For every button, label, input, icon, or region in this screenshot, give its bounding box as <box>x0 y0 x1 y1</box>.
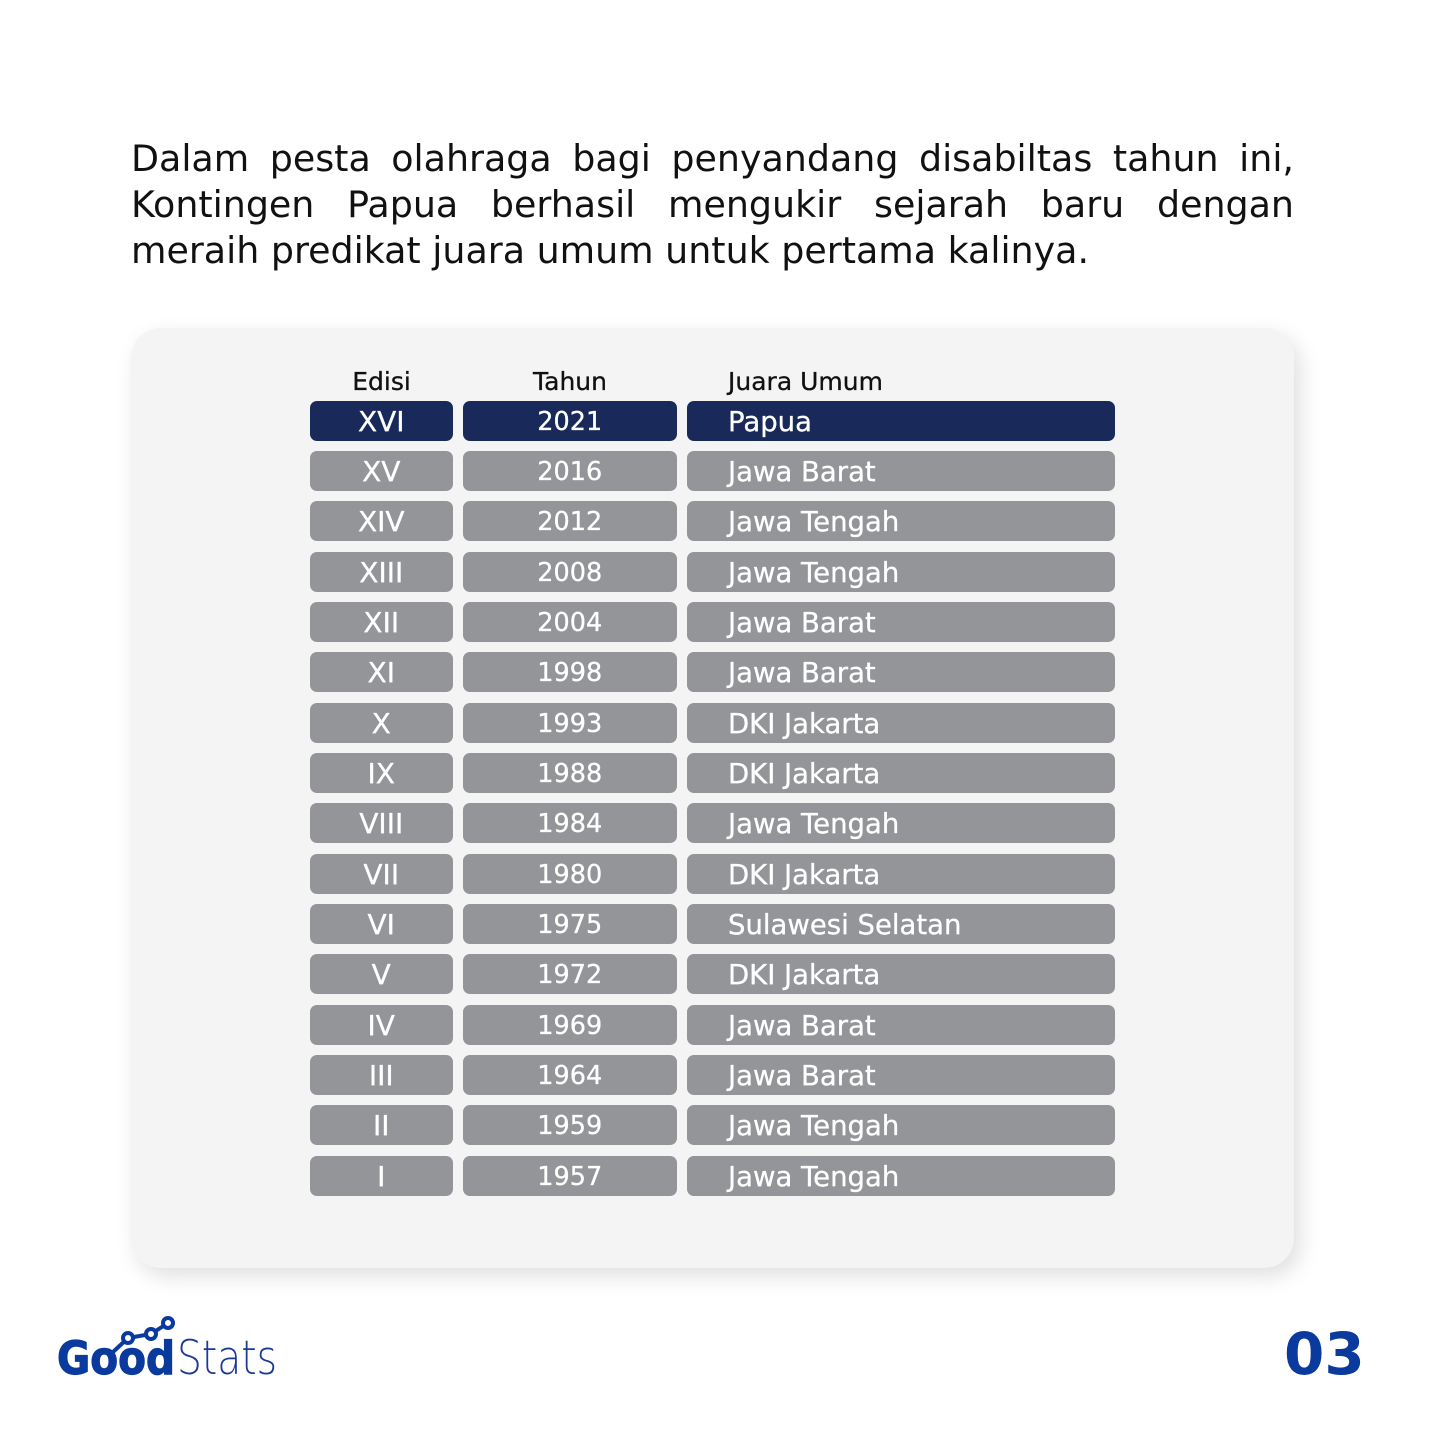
intro paragraph: Dalam pesta olahraga bagi penyandang disabiltas tahun ini, <box>131 137 1294 180</box>
row: VI 1975: 1975 <box>537 910 602 940</box>
row: XIII 2008: XIII <box>359 556 403 589</box>
row: VII 1980: DKI Jakarta <box>728 858 880 890</box>
row: XII 2004: 2004 <box>537 608 602 638</box>
row: III 1964: Jawa Barat <box>728 1060 876 1092</box>
row: IX 1988: DKI Jakarta <box>728 758 880 790</box>
row: X 1993: 1993 <box>537 708 602 738</box>
row: X 1993: X <box>372 706 391 740</box>
row: II 1959: II <box>373 1109 390 1142</box>
row: VI 1975 <box>310 904 1115 944</box>
icon: trend line with nodes <box>113 1318 173 1352</box>
row: XIV 2012: XIV <box>358 505 405 538</box>
row: XII 2004: XII <box>363 606 399 639</box>
row: XIII 2008: Jawa Tengah <box>728 557 899 589</box>
row: I 1957 <box>310 1156 1115 1196</box>
row: XI 1998: XI <box>368 656 395 689</box>
row: XVI 2021 Papua (highlighted) <box>310 401 1115 441</box>
row: V 1972: DKI Jakarta <box>728 959 880 991</box>
row: XIV 2012: 2012 <box>537 507 602 537</box>
row: V 1972: V <box>372 958 391 991</box>
row: XIII 2008 <box>310 552 1115 592</box>
row: XV 2016: Jawa Barat <box>728 456 876 488</box>
row: V 1972 <box>310 954 1115 994</box>
row: XI 1998: 1998 <box>537 658 602 688</box>
row: XIV 2012 <box>310 501 1115 541</box>
row: II 1959: Jawa Tengah <box>728 1110 899 1142</box>
row: VII 1980: 1980 <box>537 860 602 890</box>
row: IX 1988: 1988 <box>537 759 602 789</box>
row: VII 1980 <box>310 854 1115 894</box>
row: XVI 2021 Papua (highlighted): XVI <box>358 404 405 438</box>
row: VIII 1984: VIII <box>359 807 403 840</box>
wordmark: Good: Good <box>57 1332 175 1385</box>
page number: 03 <box>1284 1320 1365 1388</box>
row: VII 1980: VII <box>363 858 399 890</box>
row: XVI 2021 Papua (highlighted): 2021 <box>537 406 602 436</box>
row: IV 1969: IV <box>368 1008 395 1042</box>
panel: table card <box>131 328 1294 1268</box>
column heading: Tahun: Tahun <box>533 367 607 396</box>
row: XIII 2008: 2008 <box>537 558 602 588</box>
row: II 1959: 1959 <box>537 1111 602 1141</box>
row: X 1993: DKI Jakarta <box>728 708 880 740</box>
row: XV 2016 <box>310 451 1115 491</box>
row: II 1959 <box>310 1105 1115 1145</box>
row: XII 2004: Jawa Barat <box>728 607 876 639</box>
row: X 1993 <box>310 703 1115 743</box>
row: VIII 1984: Jawa Tengah <box>728 808 899 840</box>
logo: GoodStats <box>57 1316 277 1385</box>
row: V 1972: 1972 <box>537 960 602 990</box>
intro paragraph: Kontingen Papua berhasil mengukir sejarah baru dengan <box>131 183 1294 226</box>
intro paragraph <box>131 137 1294 272</box>
row: VI 1975: Sulawesi Selatan <box>728 909 961 941</box>
row: XIV 2012: Jawa Tengah <box>728 506 899 538</box>
row: VIII 1984 <box>310 803 1115 843</box>
row: I 1957: I <box>377 1160 385 1192</box>
row: I 1957: 1957 <box>537 1162 602 1192</box>
row: XVI 2021 Papua (highlighted): Papua <box>728 406 812 438</box>
row: III 1964: 1964 <box>537 1061 602 1091</box>
row: XV 2016: XV <box>362 455 400 488</box>
row: IV 1969: 1969 <box>537 1010 602 1040</box>
row: XV 2016: 2016 <box>537 457 602 487</box>
row: XI 1998 <box>310 652 1115 692</box>
row: III 1964 <box>310 1055 1115 1095</box>
row: VI 1975: VI <box>368 908 395 941</box>
row: IX 1988: IX <box>368 757 395 790</box>
row: IV 1969: Jawa Barat <box>728 1010 876 1042</box>
row: XII 2004 <box>310 602 1115 642</box>
intro paragraph: meraih predikat juara umum untuk pertama kalinya. <box>131 229 1089 272</box>
row: VIII 1984: 1984 <box>537 809 602 839</box>
row: IV 1969 <box>310 1005 1115 1045</box>
row: I 1957: Jawa Tengah <box>728 1160 899 1192</box>
row: III 1964: III <box>369 1059 394 1092</box>
column heading: Edisi: Edisi <box>352 367 411 396</box>
column heading: Juara Umum: Juara Umum <box>728 367 883 396</box>
row: IX 1988 <box>310 753 1115 793</box>
row: XI 1998: Jawa Barat <box>728 657 876 689</box>
